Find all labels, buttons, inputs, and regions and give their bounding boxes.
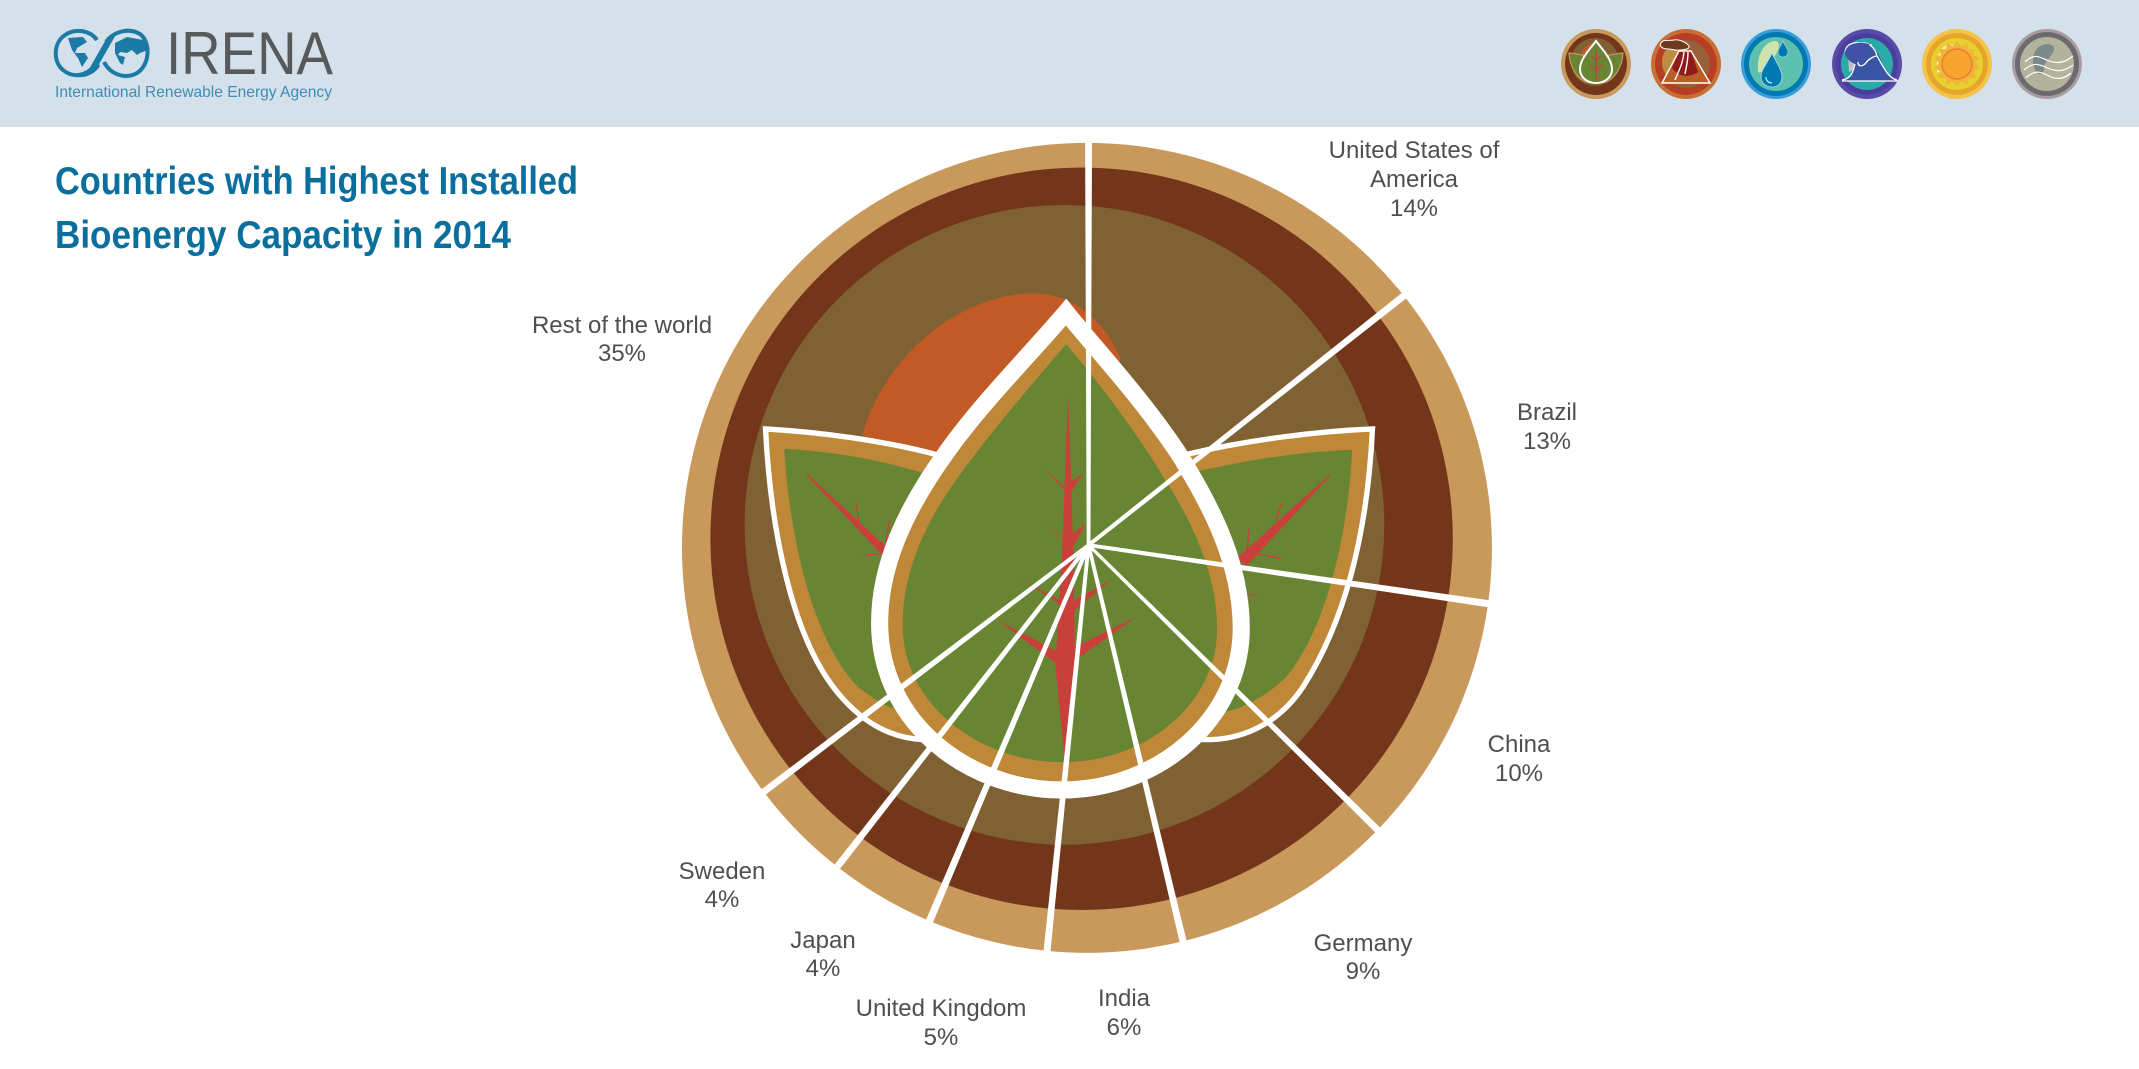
spoke: Brazil / China: [1089, 544, 1492, 607]
label: Japan: 4%: [806, 955, 840, 982]
IRENA logo: [55, 20, 333, 101]
spoke: Japan / Sweden: [836, 545, 1090, 868]
spoke: India / UK: [1044, 545, 1090, 953]
label: India: India: [1098, 985, 1150, 1012]
header band: [0, 0, 2139, 127]
label: United States of America: 14%: [1390, 195, 1438, 222]
logo wordmark: IRENA: [166, 20, 333, 87]
label: Japan: Japan: [790, 927, 856, 954]
spoke: Sweden / rest of world: [762, 544, 1089, 794]
title: Countries with Highest Installed: [55, 160, 578, 203]
title: [55, 160, 578, 257]
right leaf vein: [1237, 476, 1330, 595]
label: United States of America: United States of: [1329, 137, 1499, 164]
logo tagline: International Renewable Energy Agency: [55, 84, 332, 101]
label: Rest of the world: 35%: [598, 340, 646, 367]
spoke: China / Germany: [1088, 545, 1380, 832]
icon: wind: [2012, 29, 2082, 99]
left leaf vein: [806, 474, 889, 556]
category spokes: [762, 135, 1492, 953]
spoke: rest of world / USA: [1086, 135, 1091, 545]
label: China: 10%: [1495, 760, 1543, 787]
label: Rest of the world: Rest of the world: [532, 312, 712, 339]
dark brown ring: [710, 167, 1453, 910]
icon: ocean wave: [1832, 29, 1902, 99]
label: United Kingdom: 5%: [924, 1024, 958, 1051]
icon: hydropower drops: [1741, 29, 1811, 99]
label: Sweden: Sweden: [679, 858, 765, 885]
label: China: China: [1488, 731, 1550, 758]
icon: bioenergy leaf: [1561, 29, 1631, 99]
labels: [532, 137, 1577, 1051]
icon row: [1561, 29, 2082, 99]
label: India: 6%: [1107, 1014, 1141, 1041]
central leaf vein: [997, 392, 1137, 758]
label: United States of America: America: [1370, 166, 1459, 193]
pie chart: leaf in concentric rings: [682, 135, 1492, 953]
label: Germany: Germany: [1314, 930, 1412, 957]
right side leaf: [1188, 429, 1372, 740]
icon: solar sun: [1922, 29, 1992, 99]
icon: geothermal volcano: [1651, 29, 1721, 99]
spoke: Germany / India: [1087, 545, 1186, 943]
title: Bioenergy Capacity in 2014: [55, 214, 511, 257]
spoke: UK / Japan: [927, 545, 1090, 922]
spoke: USA / Brazil: [1088, 294, 1405, 546]
label: United Kingdom: United Kingdom: [856, 995, 1026, 1022]
label: Brazil: 13%: [1523, 428, 1571, 455]
left side leaf: [766, 429, 939, 740]
outer tan ring: [682, 143, 1492, 953]
label: Sweden: 4%: [705, 886, 739, 913]
orange sun shape: [862, 293, 1121, 505]
logo mark: infinity globes: [56, 31, 148, 77]
label: Brazil: Brazil: [1517, 399, 1577, 426]
label: Germany: 9%: [1346, 958, 1380, 985]
olive brown disc: [745, 205, 1384, 845]
central leaf: [880, 312, 1241, 790]
